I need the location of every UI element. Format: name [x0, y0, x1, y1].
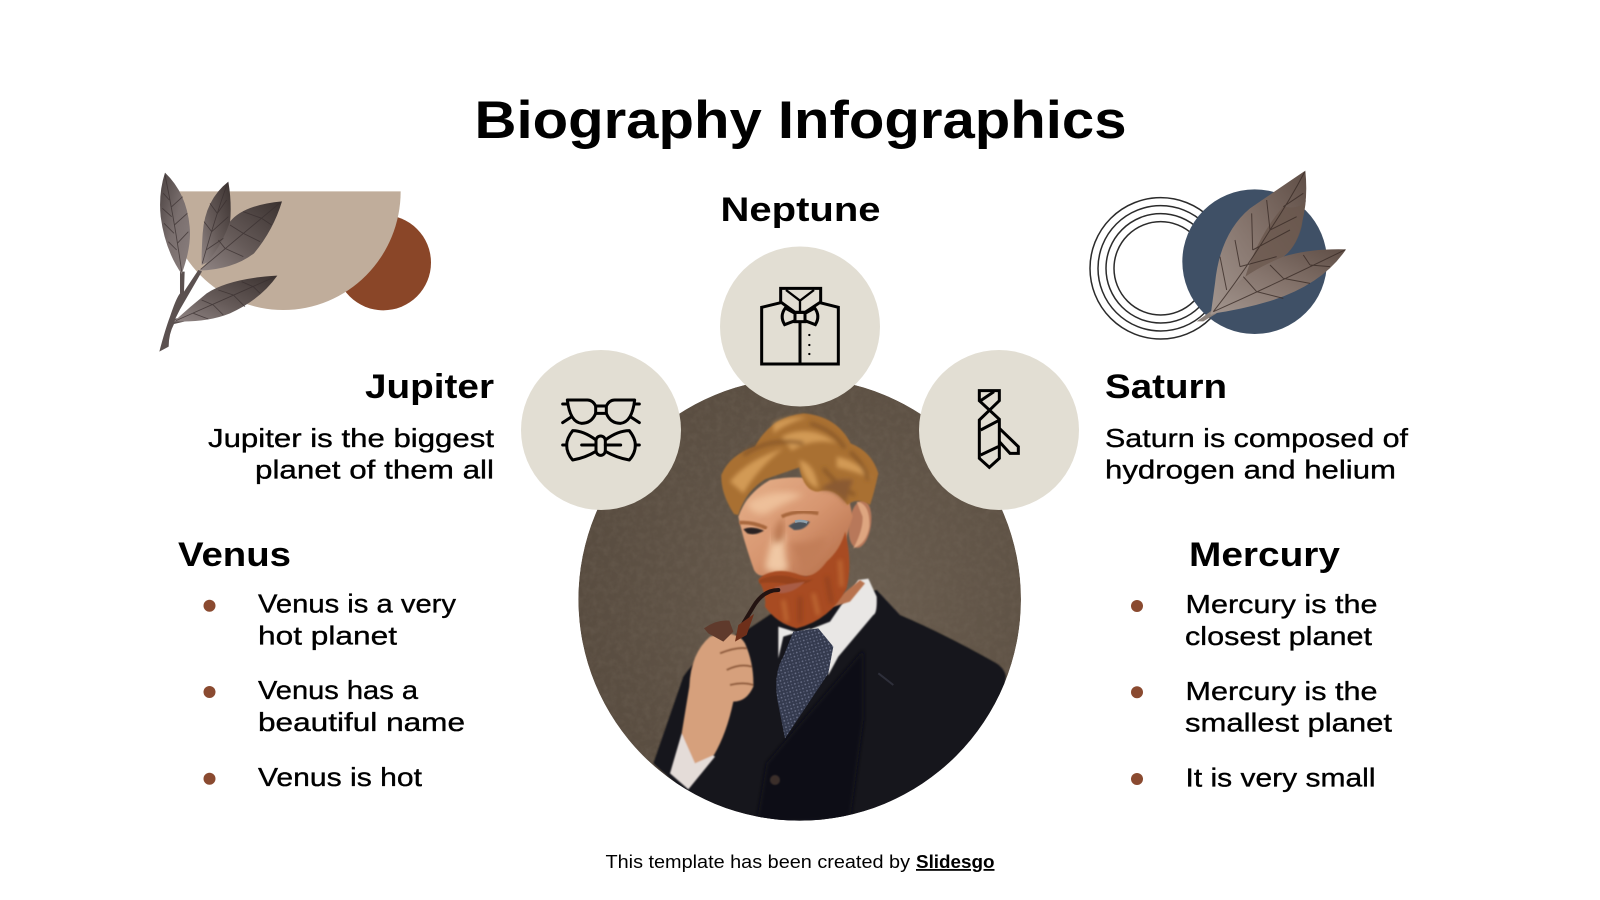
neck	[832, 580, 866, 608]
footer credit: Slidesgo	[916, 852, 995, 872]
ear	[848, 500, 872, 549]
rust circle	[336, 215, 431, 310]
text block: Jupiter: Jupiter	[365, 368, 494, 406]
text block: Venus list: Venus is hot	[258, 762, 423, 792]
face	[738, 477, 853, 577]
text block: Mercury list: Mercury is the	[1186, 676, 1378, 706]
heading: Neptune: Neptune	[720, 191, 880, 229]
leaf branch	[159, 173, 282, 352]
text block: Mercury list: smallest planet	[1185, 708, 1393, 738]
decoration: concentric rings, navy circle and leaves	[1090, 171, 1346, 339]
eyes and brows	[739, 512, 818, 534]
text block: Mercury list: Mercury	[1189, 536, 1340, 574]
collar	[778, 579, 877, 675]
icon circle: shirt with bow tie	[720, 246, 880, 406]
hand and cuff	[670, 634, 753, 789]
text block: Jupiter: Jupiter is the biggest	[208, 423, 495, 453]
title: Biography Infographics	[474, 91, 1126, 150]
backdrop	[578, 378, 1021, 821]
text block: Saturn: hydrogen and helium	[1105, 454, 1396, 484]
lips	[774, 582, 805, 593]
icon circle: necktie	[919, 350, 1079, 510]
text block: Venus list: Venus is a very	[258, 588, 456, 618]
text block: Jupiter	[208, 368, 495, 484]
pipe	[704, 590, 778, 642]
text block: Venus list	[178, 536, 465, 792]
text block: Mercury list: It is very small	[1186, 763, 1376, 793]
concentric rings	[1090, 198, 1231, 339]
text block: Mercury list: closest planet	[1185, 621, 1373, 651]
necktie	[776, 628, 833, 738]
face highlights and shadows	[744, 490, 814, 573]
text block: Venus list: Venus	[178, 536, 291, 574]
text block: Saturn	[1105, 368, 1409, 484]
leaves	[1197, 171, 1346, 321]
icon: shirt	[762, 288, 838, 364]
footer credit: This template has been created by	[606, 852, 910, 872]
text block: Venus list: hot planet	[258, 620, 398, 650]
beard	[758, 532, 849, 628]
icon: glasses and bow tie	[563, 400, 639, 460]
text block: Venus list: Venus has a	[258, 675, 419, 705]
decoration: leaf branch with beige semicircle and rust circle	[159, 173, 431, 352]
beige semicircle	[166, 191, 401, 310]
text block: Venus list: beautiful name	[258, 707, 465, 737]
text block: Saturn: Saturn	[1105, 368, 1227, 406]
hair	[721, 413, 878, 515]
text block: Saturn: Saturn is composed of	[1105, 423, 1409, 453]
text block: Mercury list	[1131, 536, 1393, 793]
icon circle: glasses and bow tie	[521, 350, 681, 510]
navy circle	[1182, 189, 1327, 334]
text block: Mercury list: Mercury is the	[1186, 589, 1378, 619]
jacket	[652, 589, 1007, 821]
portrait photo in circle	[578, 384, 1021, 821]
icon: necktie	[979, 391, 1018, 467]
text block: Jupiter: planet of them all	[255, 454, 494, 484]
